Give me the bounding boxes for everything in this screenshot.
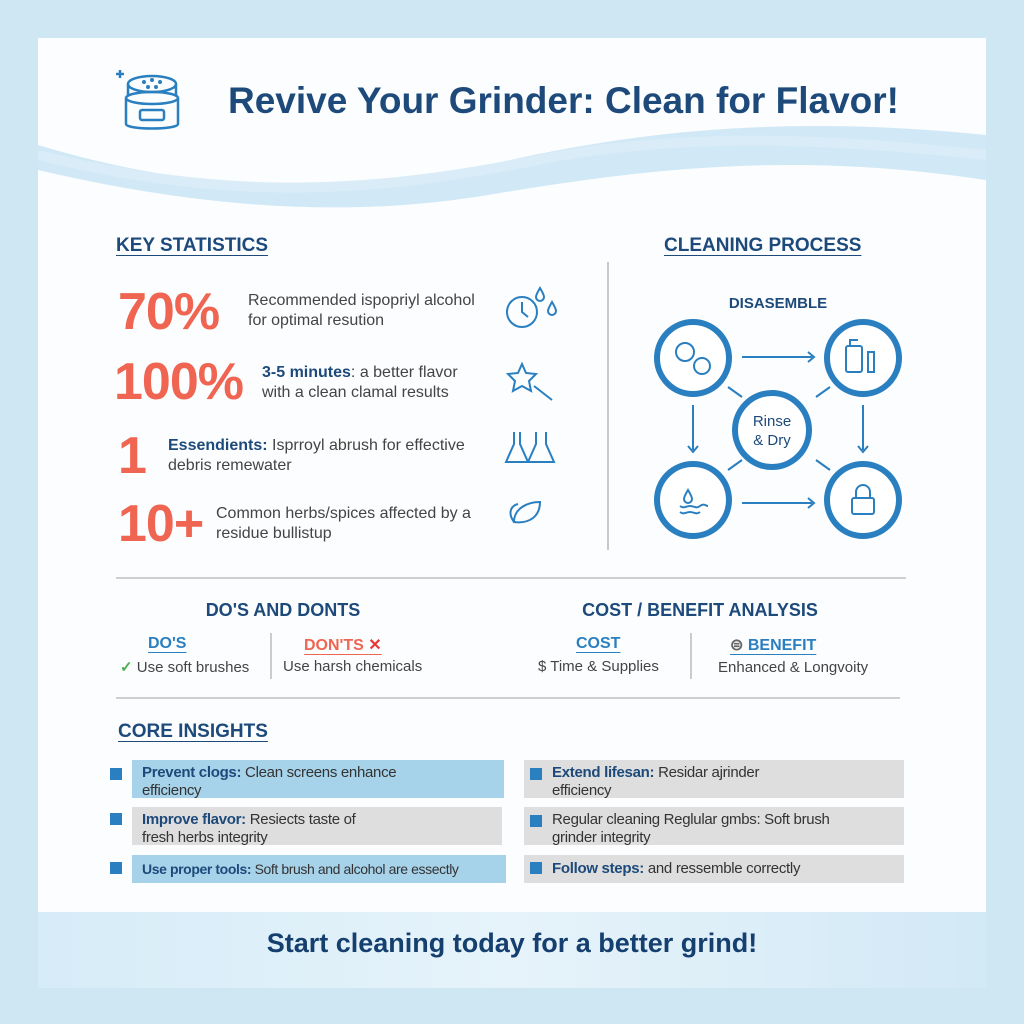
insights left: Use proper tools: Soft brush and alcohol are essectly	[142, 861, 459, 877]
stat 70%: Recommended ispopriyl alcohol	[248, 292, 475, 309]
panel: cost benefit: ⊜ BENEFIT	[730, 637, 816, 654]
stat 10+	[118, 495, 471, 553]
footer text: Start cleaning today for a better grind!	[267, 928, 757, 958]
panel: dos and donts: ✓ Use soft brushes	[120, 659, 249, 676]
stat 100%: 100%	[114, 353, 243, 411]
process diagram: DISASEMBLE	[729, 295, 827, 312]
stat 10+: Common herbs/spices affected by a	[216, 505, 471, 522]
process diagram	[654, 295, 902, 539]
stat 1: debris remewater	[168, 457, 292, 474]
panel: cost benefit: COST / BENEFIT ANALYSIS	[582, 600, 818, 620]
stat 70%: 70%	[118, 283, 219, 341]
insights right: Follow steps: and ressemble correctly	[552, 860, 800, 877]
stat 10+: residue bullistup	[216, 525, 332, 542]
wave decoration	[38, 126, 986, 208]
stat 100%	[114, 353, 458, 411]
insights left: fresh herbs integrity	[142, 829, 267, 846]
footer band	[38, 912, 986, 988]
process diagram: & Dry	[753, 432, 791, 449]
stat 100%: with a clean clamal results	[262, 384, 449, 401]
panel: cost benefit: $ Time & Supplies	[538, 658, 659, 675]
panel: cost benefit: Enhanced & Longvoity	[718, 659, 868, 676]
heading: cleaning process: CLEANING PROCESS	[664, 235, 861, 256]
insights right: efficiency	[552, 782, 611, 799]
heading: core insights: CORE INSIGHTS	[118, 721, 268, 742]
insights left	[110, 760, 506, 883]
stat 10+: 10+	[118, 495, 203, 553]
panel: dos and donts: DON'TS ✕	[304, 637, 382, 654]
panel: dos and donts: DO'S AND DONTS	[206, 600, 360, 620]
icons: stats	[504, 286, 557, 524]
stat 70%	[118, 283, 475, 341]
divider	[116, 697, 900, 699]
insights right	[524, 760, 904, 883]
panel: cost benefit	[538, 600, 868, 679]
divider vertical	[607, 262, 609, 550]
stat 1	[118, 427, 465, 485]
panel: dos and donts: DO'S	[148, 635, 186, 652]
stat 100%: 3-5 minutes: a better flavor	[262, 364, 458, 381]
insights left: Prevent clogs: Clean screens enhance	[142, 764, 396, 781]
icon: grinder	[116, 70, 180, 130]
panel: cost benefit: COST	[576, 635, 620, 652]
process diagram: Rinse	[753, 413, 791, 430]
heading: key statistics: KEY STATISTICS	[116, 235, 268, 256]
stat 70%: for optimal resution	[248, 312, 384, 329]
stat 1: 1	[118, 427, 146, 485]
insights right: grinder integrity	[552, 829, 650, 846]
insights right: Regular cleaning Reglular gmbs: Soft brush	[552, 811, 830, 828]
insights right: Extend lifesan: Residar ajrinder	[552, 764, 759, 781]
panel: dos and donts: Use harsh chemicals	[283, 658, 422, 675]
title: Revive Your Grinder: Clean for Flavor!	[228, 80, 899, 121]
insights left: efficiency	[142, 782, 201, 799]
panel: dos and donts	[120, 600, 422, 679]
insights left: Improve flavor: Resiects taste of	[142, 811, 356, 828]
stat 1: Essendients: Isprroyl abrush for effective	[168, 437, 465, 454]
divider	[116, 577, 906, 579]
